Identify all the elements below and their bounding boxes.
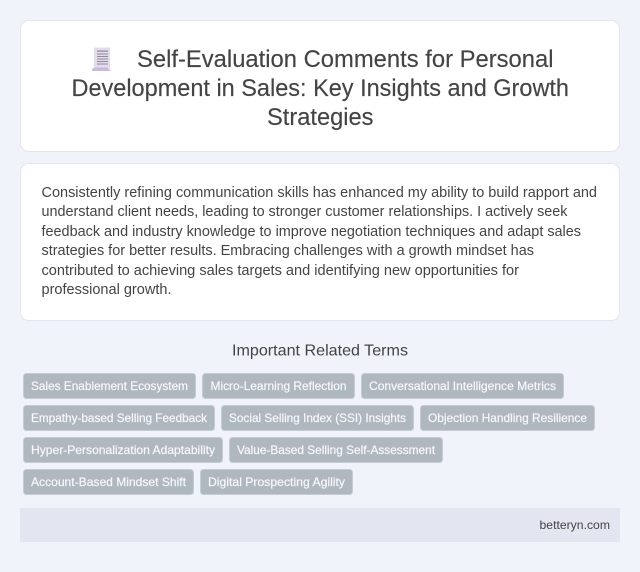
text block: evaluation comment: understand client needs, leading to stronger customer relationships. I actively seek [42,204,568,220]
text block: evaluation comment: professional growth. [42,282,172,298]
tag: Objection Handling Resilience [428,411,587,425]
footer [20,508,620,542]
title: Development in Sales: Key Insights and Growth [72,75,569,102]
tag [24,470,194,494]
icon: receipt scroll [92,48,112,71]
text block: evaluation comment: Consistently refining communication skills has enhanced my ability to build rapport and [42,185,597,201]
tag: Empathy-based Selling Feedback [31,411,208,425]
tag: Sales Enablement Ecosystem [31,379,188,393]
tag: Social Selling Index (SSI) Insights [229,411,406,425]
tag [24,374,196,398]
text block: evaluation comment: strategies for better results. Embracing challenges with a growth mindset has [42,243,534,259]
tag [202,374,354,398]
tag: Hyper-Personalization Adaptability [31,443,215,457]
title: Strategies [267,104,374,131]
panel: title header [20,20,620,152]
title [72,46,569,131]
tag: Digital Prospecting Agility [208,475,345,489]
tag list [24,374,594,494]
heading: related terms: Important Related Terms [232,342,408,360]
title: Self-Evaluation Comments for Personal [137,46,554,73]
tag [420,406,594,430]
tag [222,406,414,430]
tag [200,470,352,494]
footer: betteryn.com [540,518,610,532]
tag: Account-Based Mindset Shift [31,475,187,489]
text block: evaluation comment: contributed to achieving sales targets and identifying new opportunities for [42,263,519,279]
tag: Micro-Learning Reflection [210,379,346,393]
tag: Value-Based Selling Self-Assessment [237,443,436,457]
tag [24,438,222,462]
panel: self-evaluation text [20,164,620,320]
text block: evaluation comment [42,185,597,298]
text block: evaluation comment: feedback and industry knowledge to improve negotiation techniques and adapt sales [42,224,581,240]
tag [362,374,564,398]
tag: Conversational Intelligence Metrics [369,379,556,393]
tag [24,406,214,430]
tag [230,438,442,462]
